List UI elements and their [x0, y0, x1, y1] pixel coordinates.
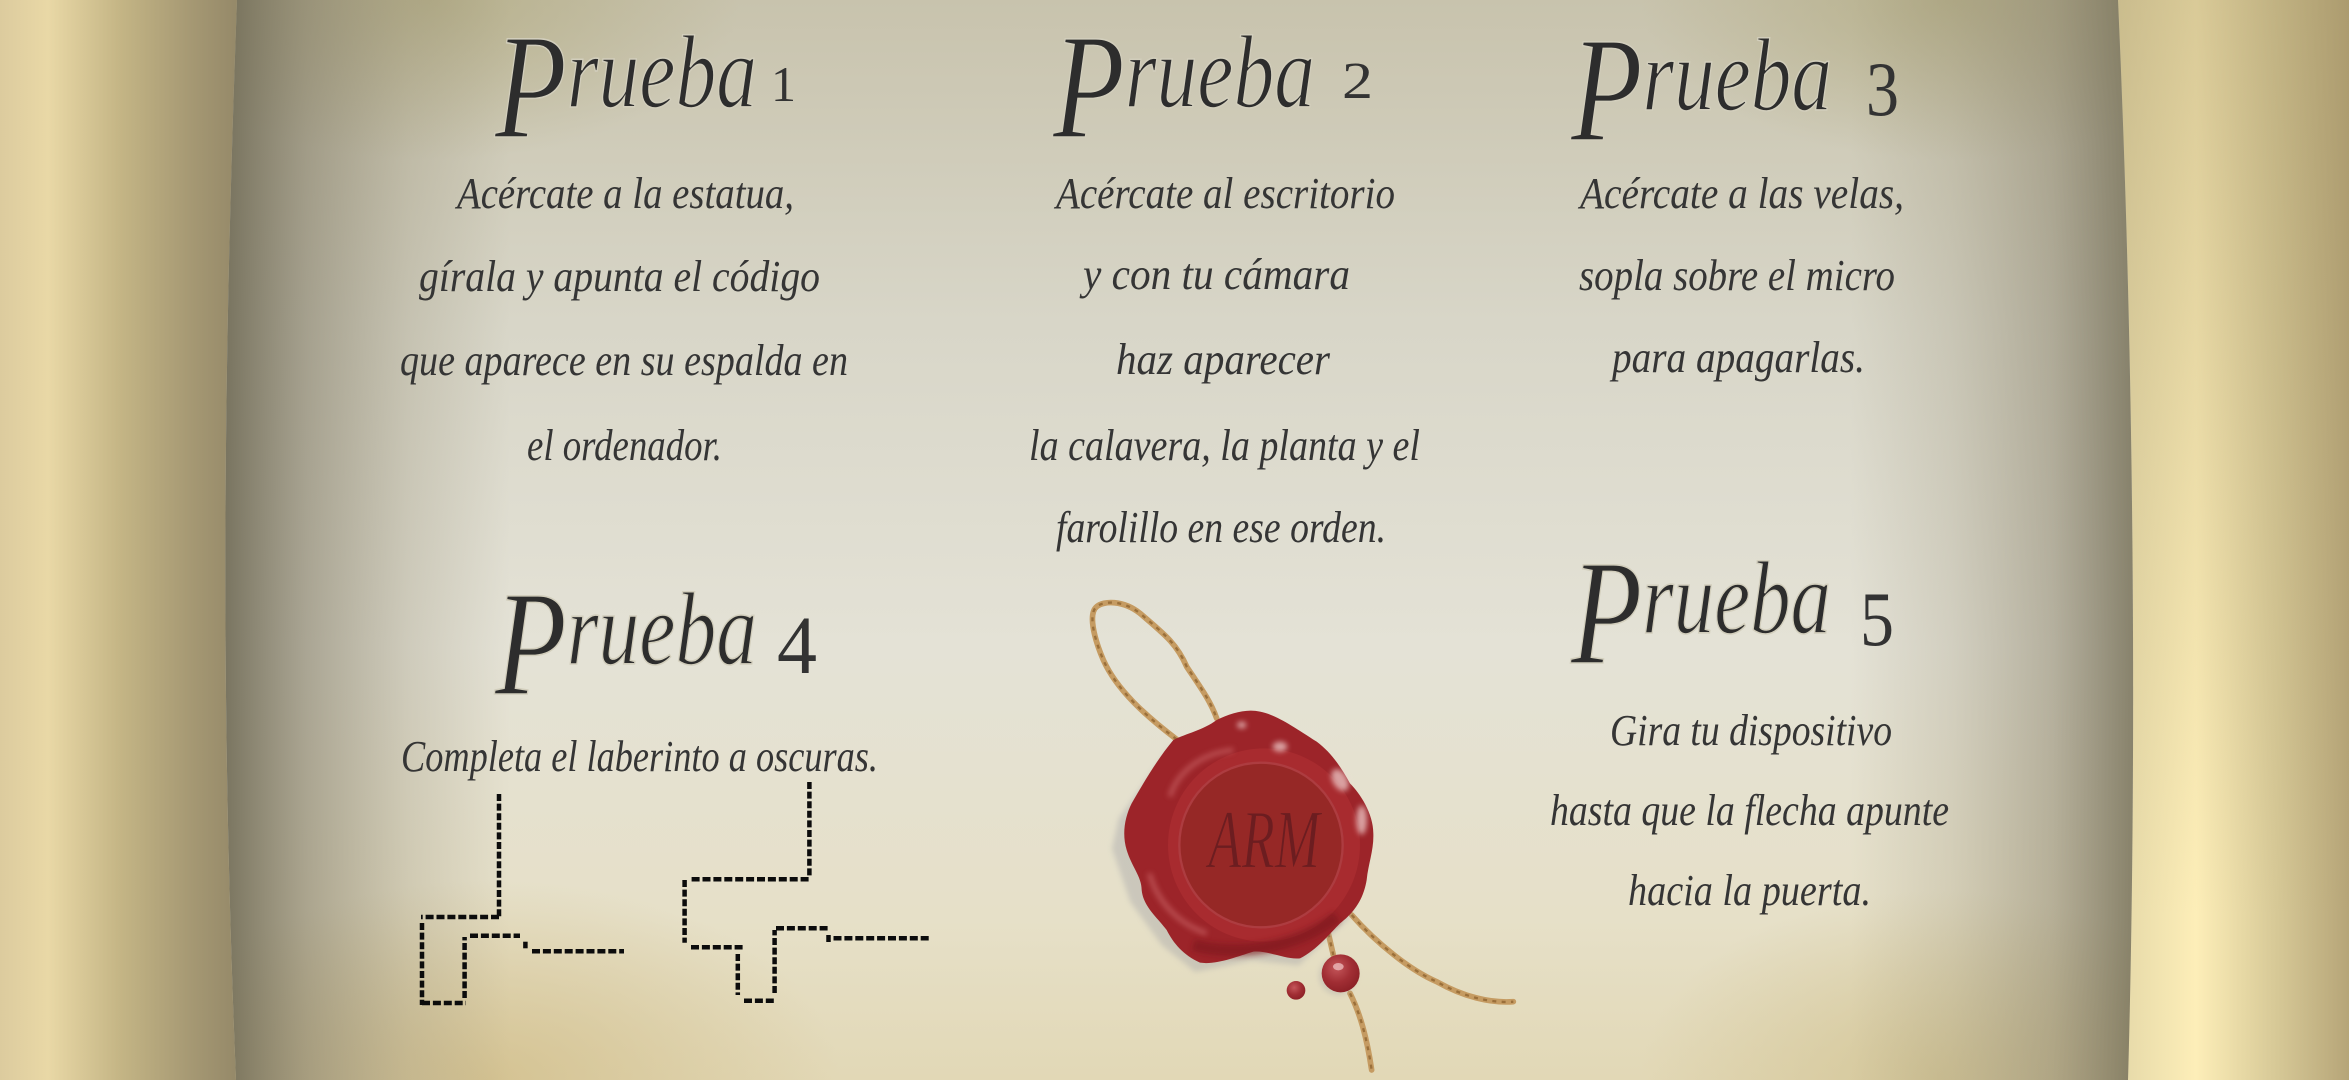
text: prueba 2 instructions	[1029, 169, 1420, 552]
heading: prueba 3: rueba	[1643, 18, 1832, 133]
panel: prueba 4	[401, 561, 929, 1005]
right parchment roll	[2110, 0, 2349, 1080]
seal face	[1179, 763, 1343, 927]
panel: prueba 3	[1570, 7, 1904, 382]
panel: prueba 5	[1550, 530, 1949, 915]
panel: prueba 2	[1029, 4, 1420, 552]
twine	[1092, 603, 1513, 1070]
heading: prueba 2	[1052, 4, 1373, 170]
heading: prueba 3: P	[1570, 7, 1643, 173]
text: prueba 1 instructions	[400, 169, 848, 470]
heading: prueba 5: rueba	[1642, 541, 1831, 656]
heading: prueba 3	[1570, 7, 1899, 173]
text: prueba 4 instructions: Completa el laberinto a oscuras.	[401, 732, 878, 781]
left parchment roll	[0, 0, 240, 1080]
text: prueba 5 instructions: hasta que la flecha apunte	[1550, 786, 1949, 835]
wax drop small	[1287, 981, 1305, 1000]
text: prueba 2 instructions: Acércate al escritorio	[1053, 169, 1395, 218]
text: prueba 2 instructions: farolillo en ese orden.	[1056, 503, 1386, 552]
heading: prueba 5	[1570, 530, 1894, 696]
heading: prueba 2: rueba	[1125, 15, 1315, 130]
text: prueba 1 instructions: que aparece en su espalda en	[400, 336, 848, 385]
text: prueba 1 instructions: Acércate a la estatua,	[454, 169, 794, 218]
heading: prueba 3: 3	[1866, 46, 1899, 132]
heading: prueba 2: 2	[1342, 53, 1373, 110]
heading: prueba 4: 4	[777, 599, 817, 691]
icon: red wax seal with twine	[1092, 603, 1513, 1070]
text: prueba 1 instructions: gírala y apunta el código	[419, 252, 820, 301]
heading: prueba 1: P	[494, 4, 567, 170]
panel: prueba 1	[400, 4, 848, 470]
text: prueba 2 instructions: y con tu cámara	[1079, 250, 1350, 299]
text: prueba 3 instructions: sopla sobre el micro	[1579, 251, 1895, 300]
maze path 2	[685, 782, 929, 1001]
wax body	[1124, 711, 1373, 963]
heading: prueba 4: P	[494, 561, 567, 727]
text: prueba 3 instructions	[1577, 169, 1904, 382]
heading: prueba 4: rueba	[567, 572, 757, 687]
text: prueba 5 instructions	[1550, 706, 1949, 915]
heading: prueba 2: P	[1052, 4, 1125, 170]
heading: prueba 1	[494, 4, 796, 170]
heading: prueba 5: 5	[1860, 576, 1894, 662]
heading: prueba 5: P	[1570, 530, 1642, 696]
text: prueba 3 instructions: Acércate a las velas,	[1577, 169, 1904, 218]
text: prueba 1 instructions: el ordenador.	[527, 421, 722, 470]
seal monogram: ARM	[1205, 794, 1323, 886]
heading: prueba 1: rueba	[567, 15, 757, 130]
text: prueba 2 instructions: la calavera, la planta y el	[1029, 421, 1420, 470]
text: prueba 3 instructions: para apagarlas.	[1609, 333, 1865, 382]
maze path 1	[421, 794, 624, 1005]
text: prueba 2 instructions: haz aparecer	[1116, 335, 1331, 384]
wax drop large	[1319, 954, 1360, 995]
text: prueba 5 instructions: hacia la puerta.	[1628, 866, 1871, 915]
wax rim	[1168, 748, 1360, 942]
wax shadow	[1112, 719, 1367, 972]
heading: prueba 1: 1	[771, 56, 796, 112]
wax highlights	[1237, 722, 1367, 835]
text: prueba 5 instructions: Gira tu dispositivo	[1610, 706, 1892, 755]
heading: prueba 4	[494, 561, 817, 727]
